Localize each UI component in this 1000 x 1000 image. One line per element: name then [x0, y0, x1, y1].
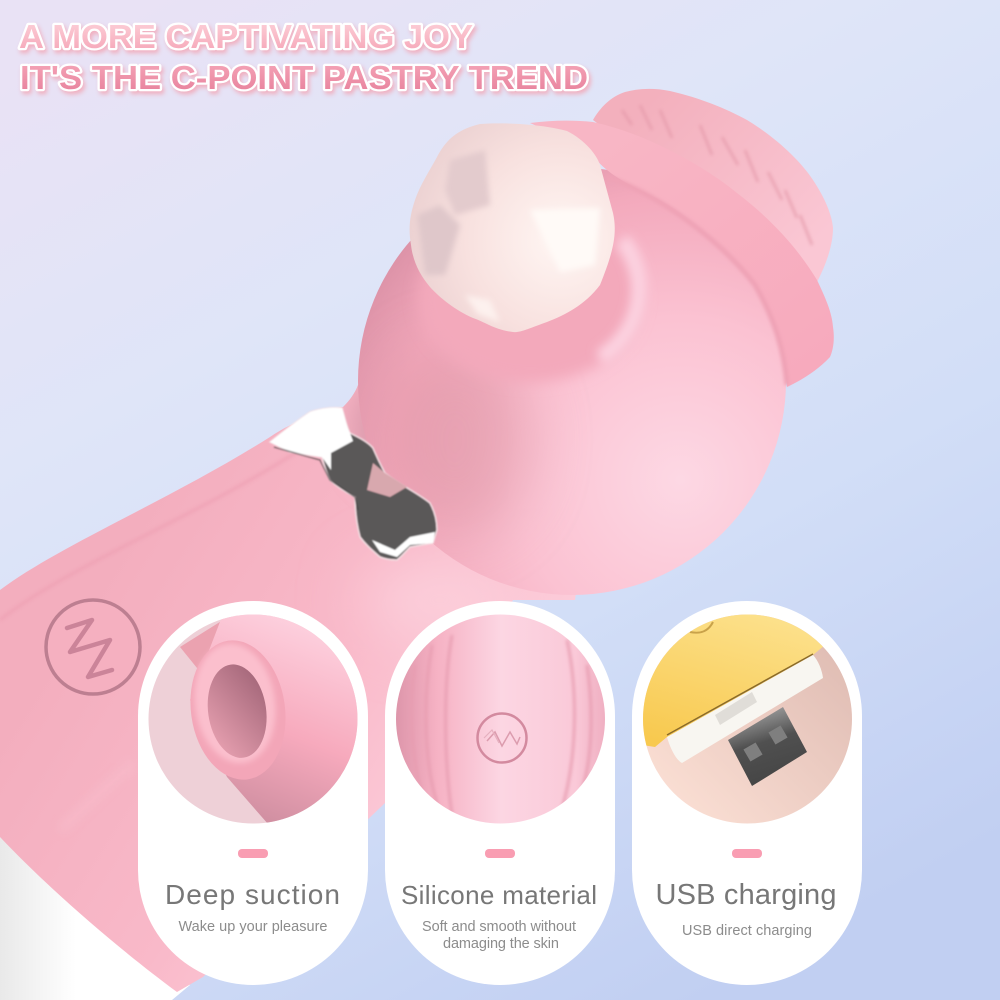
deep suction photo: [148, 614, 358, 824]
silicone button icon: [478, 714, 526, 762]
usb title: USB charging: [656, 879, 836, 911]
usb plug: [728, 707, 807, 786]
product: white base tip: [0, 830, 190, 1000]
panel: deep suction: [138, 601, 368, 985]
silicone text: Soft and smooth without: [422, 919, 576, 935]
silicone text: [422, 919, 576, 952]
panel: silicone material: [385, 601, 615, 985]
product: ball tip: [410, 123, 615, 332]
usb text: USB direct charging: [682, 923, 812, 939]
deep suction text: Wake up your pleasure: [178, 919, 328, 935]
product: ball collar: [418, 214, 642, 382]
heading line 2: IT'S THE C-POINT PASTRY TREND: [20, 59, 588, 96]
usb marker: [732, 849, 762, 858]
product: hat crown: [593, 89, 833, 282]
product: head sphere: [358, 167, 786, 595]
product: handle: [0, 370, 600, 992]
product: hat brim: [530, 121, 834, 387]
usb plate: [667, 655, 823, 763]
deep suction title: Deep suction: [165, 879, 340, 910]
silicone text: damaging the skin: [443, 936, 559, 952]
panel: usb charging: [632, 601, 862, 985]
silicone marker: [485, 849, 515, 858]
heading line 1: A MORE CAPTIVATING JOY: [19, 18, 473, 55]
product: power button icon: [46, 600, 140, 694]
product: silver bow: [270, 408, 437, 560]
heading: [19, 18, 588, 96]
suction ring: [190, 640, 286, 780]
deep suction marker: [238, 849, 268, 858]
usb photo: [642, 614, 854, 824]
silicone title: Silicone material: [401, 880, 597, 910]
silicone photo: [395, 614, 607, 824]
